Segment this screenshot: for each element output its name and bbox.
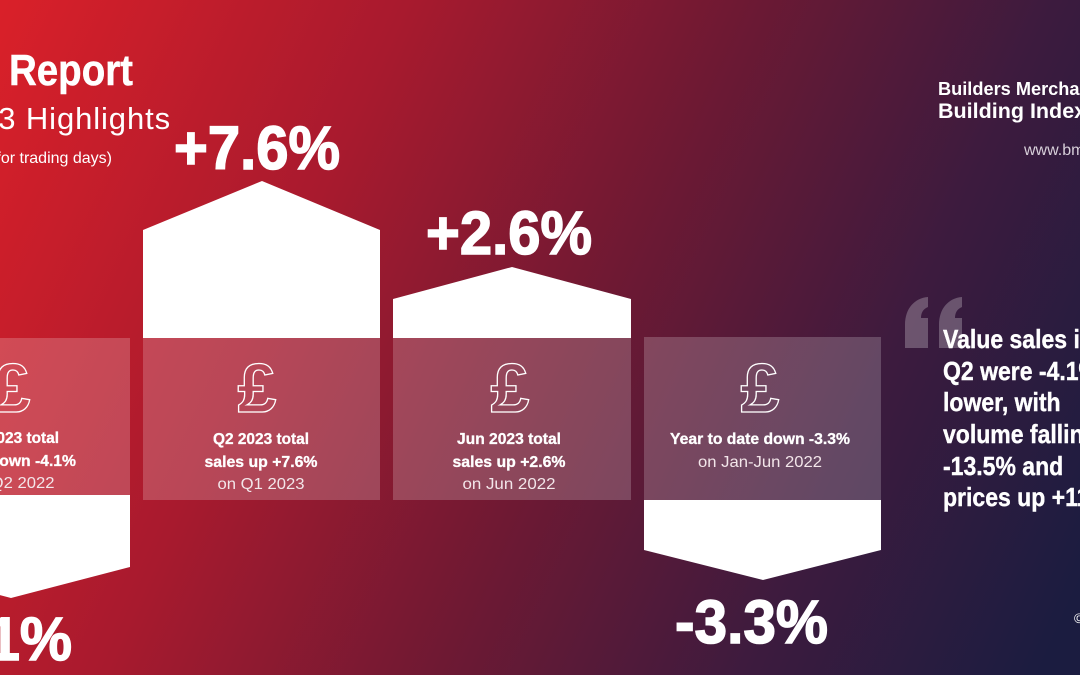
- panel text: [452, 431, 566, 493]
- big figure: -3.3%: [675, 588, 828, 656]
- icon: pound: £: [238, 349, 277, 427]
- panel text: sales up +2.6%: [452, 454, 566, 471]
- panel text: on Jun 2022: [462, 476, 556, 493]
- title block: [0, 46, 171, 167]
- quote text: lower, with: [943, 389, 1061, 417]
- quote text: [943, 326, 1080, 512]
- card: Q2 on Q1, up +7.6%: [143, 114, 380, 500]
- panel text: on Jan-Jun 2022: [698, 454, 822, 471]
- arrow up: [393, 267, 631, 338]
- arrow down: [644, 500, 881, 580]
- icon: pound: £: [491, 349, 530, 427]
- arrow down: [0, 495, 130, 598]
- card: Q2 year on year, down -4.1%: [0, 338, 130, 673]
- big figure: +7.6%: [174, 114, 340, 182]
- quote text: -13.5% and: [943, 453, 1063, 481]
- logo: Builders Merchants Building Index: [938, 79, 1080, 123]
- panel: [644, 337, 881, 500]
- panel text: [204, 431, 318, 493]
- panel text: sales up +7.6%: [204, 454, 318, 471]
- panel text: Jun 2023 total: [457, 431, 561, 448]
- panel: [393, 338, 631, 500]
- icon: pound: £: [741, 349, 780, 427]
- card: June, up +2.6%: [393, 199, 631, 500]
- panel text: [0, 430, 76, 492]
- icon: quotation mark: [905, 297, 962, 348]
- card: year to date, down -3.3%: [644, 337, 881, 656]
- big figure: +2.6%: [426, 199, 592, 267]
- panel text: [670, 431, 850, 471]
- panel text: Q2 2023 total: [213, 431, 309, 448]
- panel text: on Q1 2023: [218, 476, 305, 493]
- panel text: Year to date down -3.3%: [670, 431, 850, 448]
- panel: [0, 338, 130, 495]
- arrow up: [143, 181, 380, 338]
- panel: [143, 338, 380, 500]
